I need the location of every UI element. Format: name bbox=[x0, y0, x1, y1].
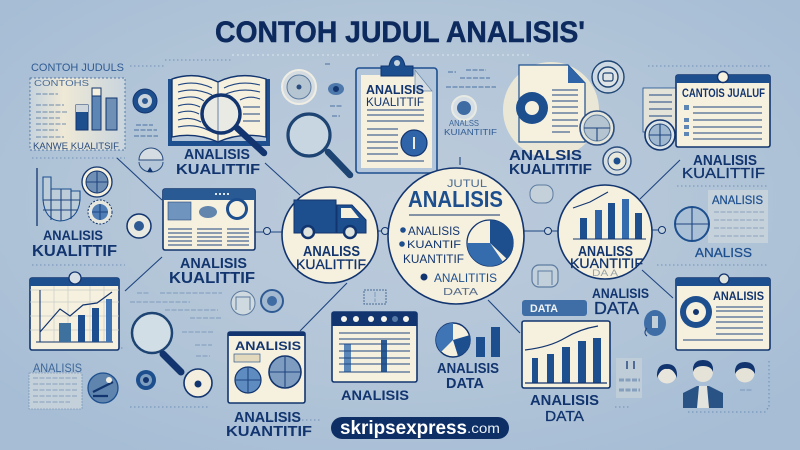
panel: top-left contoh judul: CONTOHS bbox=[34, 79, 89, 88]
panel: analisis kuantitatif card: ANALISIS bbox=[235, 341, 301, 353]
faint icons top middle bbox=[325, 64, 496, 116]
icon: gauge circle bbox=[282, 70, 316, 104]
small faint notes panel bbox=[616, 358, 642, 398]
icon: top-right document on disc bbox=[503, 62, 599, 158]
icon: magnifier top bbox=[288, 114, 350, 175]
icon: small concentric circle bbox=[136, 370, 156, 390]
icon: small faint frame bbox=[364, 290, 386, 304]
label: analisis data middle: ANALISIS bbox=[437, 360, 499, 377]
panel: lower-left analisis note bbox=[29, 361, 82, 409]
panel: centre-left window bbox=[163, 189, 255, 250]
label: analisis kualitatif centre-left: ANALISIS bbox=[180, 256, 247, 272]
label: analisis kualitatif left: KUALITTIF bbox=[32, 243, 117, 260]
label: analisis kualitatif left: ANALISIS bbox=[43, 228, 103, 243]
label: analisis kualitatif centre-left bbox=[169, 256, 255, 287]
icon: faint robot frame bbox=[532, 265, 558, 287]
icon: clipboard document: ANALISIS bbox=[366, 82, 424, 97]
label: analisis kualitatif top right bbox=[509, 147, 592, 178]
label: analsis kuantitif small bbox=[444, 96, 497, 137]
panel: central analisis circle: JUTUL bbox=[447, 178, 487, 190]
label: analisis data bottom: DATA bbox=[545, 408, 584, 425]
icon: open book with magnifier bbox=[168, 76, 270, 153]
label: analisis data right bbox=[592, 286, 649, 318]
label: analisis kuantitatif bottom: KUANTITIF bbox=[226, 423, 312, 440]
panel: lower-left analisis note: ANALISIS bbox=[33, 361, 82, 375]
label: analisis kualitatif under book: ANALISIS bbox=[184, 146, 250, 163]
label: analisis kualitatif right: KUALITTIF bbox=[682, 165, 765, 182]
icon: clipboard document bbox=[356, 56, 437, 173]
panel: right bar chart circle bbox=[558, 185, 652, 279]
label: analisis kualitatif under book bbox=[176, 146, 260, 178]
icon: target circle lower bbox=[184, 369, 212, 397]
panel: right bar chart circle: KUANTITIF bbox=[570, 255, 643, 271]
panel: central analisis circle bbox=[388, 168, 524, 304]
icon: pie and bars bbox=[436, 323, 500, 357]
label: analisis data middle bbox=[437, 360, 499, 392]
panel: contoh judul window right: CANTOIS JUALUF bbox=[682, 88, 765, 100]
label: analisis data bottom bbox=[530, 392, 599, 425]
panel: right bar chart circle: DA A bbox=[592, 268, 618, 278]
label: analisis kuantitatif bottom: ANALISIS bbox=[234, 409, 301, 426]
icon: eye bbox=[328, 83, 344, 95]
small faint notes cluster bbox=[130, 293, 222, 356]
icon: crosshair circle bbox=[82, 167, 112, 197]
icon: concentric ring bbox=[592, 61, 624, 93]
icon: dial ring bbox=[580, 111, 614, 145]
label: analisis middle: ANALISIS bbox=[341, 387, 409, 403]
pill: website: .com bbox=[467, 420, 500, 436]
icon: compass dial right bbox=[645, 120, 675, 150]
panel: top-left contoh judul: CONTOH JUDULS bbox=[31, 62, 124, 74]
panel: donut analisis window: ANALISIS bbox=[713, 289, 764, 303]
panel: top-left contoh judul bbox=[30, 62, 125, 151]
label: analisis kualitatif left bbox=[32, 228, 117, 260]
panel: line and bar chart bbox=[30, 272, 119, 350]
label: analisis data middle: DATA bbox=[446, 375, 484, 392]
panel: central analisis circle: ANALISIS bbox=[408, 226, 460, 238]
icon: clipboard document: KUALITTIF bbox=[366, 95, 424, 109]
icon: bowl bar chart bbox=[37, 168, 80, 226]
label: data tag: DATA bbox=[530, 303, 558, 315]
icon: lower-left badge bbox=[88, 373, 118, 403]
connector lines bbox=[117, 157, 680, 333]
title: CONTOH JUDUL ANALISIS' bbox=[215, 16, 585, 49]
panel: donut analisis window bbox=[676, 274, 770, 350]
panel: central analisis circle: KUANTIF bbox=[407, 239, 461, 251]
label: data tag bbox=[522, 300, 587, 316]
label: analisis kualitatif under book: KUALITTIF bbox=[176, 161, 260, 178]
label: analisis kualitatif top right: KUALITITIF bbox=[509, 161, 592, 178]
panel: central analisis circle: ANALISIS bbox=[408, 186, 503, 212]
icon: small circle bbox=[127, 214, 151, 238]
panel: truck circle bbox=[282, 187, 378, 283]
icon: people bbox=[657, 360, 769, 410]
label: analisis kuantitatif bottom bbox=[226, 409, 312, 440]
panel: middle table window bbox=[332, 312, 417, 382]
icon: outlined face circle bbox=[530, 185, 553, 203]
panel: right analisis note bbox=[675, 190, 768, 260]
label: analisis kualitatif centre-left: KUALITTIF bbox=[169, 270, 255, 287]
icon: small faint circles bbox=[231, 290, 283, 315]
panel: truck circle: KUALITTIF bbox=[296, 256, 366, 272]
label: analisis kualitatif right bbox=[682, 152, 765, 182]
panel: central analisis circle: DATA bbox=[443, 287, 478, 298]
label: analisis kualitatif right: ANALISIS bbox=[693, 152, 757, 169]
panel: analisis kuantitatif card bbox=[228, 332, 305, 403]
icon: large magnifier lower-left bbox=[132, 313, 181, 372]
panel: right analisis note: ANALISIS bbox=[712, 193, 763, 207]
panel: data bar chart bbox=[522, 321, 610, 388]
pill: website bbox=[331, 417, 509, 439]
label: analsis kuantitif small: KUIANTITIF bbox=[444, 127, 497, 137]
label: analisis data bottom: ANALISIS bbox=[530, 392, 599, 409]
panel: central analisis circle: ANALITITIS bbox=[434, 273, 497, 285]
panel: contoh judul window right bbox=[643, 72, 770, 147]
panel: right bar chart circle: ANALISS bbox=[578, 244, 633, 260]
panel: right analisis note: ANALISS bbox=[695, 245, 752, 260]
label: analisis data right: DATA bbox=[594, 298, 639, 318]
panel: central analisis circle: KUANTITIF bbox=[403, 252, 464, 266]
icon: compass circle bbox=[88, 200, 112, 224]
icon: small badge circle bbox=[603, 147, 631, 175]
panel: truck circle: ANALISS bbox=[303, 243, 360, 260]
icon: bulb badge bbox=[644, 310, 666, 336]
label: analisis kualitatif top right: ANALSIS bbox=[509, 147, 582, 164]
label: analisis data right: ANALISIS bbox=[592, 286, 649, 301]
pill: website: skripsexpress bbox=[340, 418, 467, 439]
panel: top-left contoh judul: KANWE KUALITSIF bbox=[33, 141, 120, 151]
icon: target circle bbox=[133, 89, 158, 136]
label: analsis kuantitif small: ANALSS bbox=[449, 118, 479, 128]
icon: globe circle bbox=[139, 148, 163, 172]
